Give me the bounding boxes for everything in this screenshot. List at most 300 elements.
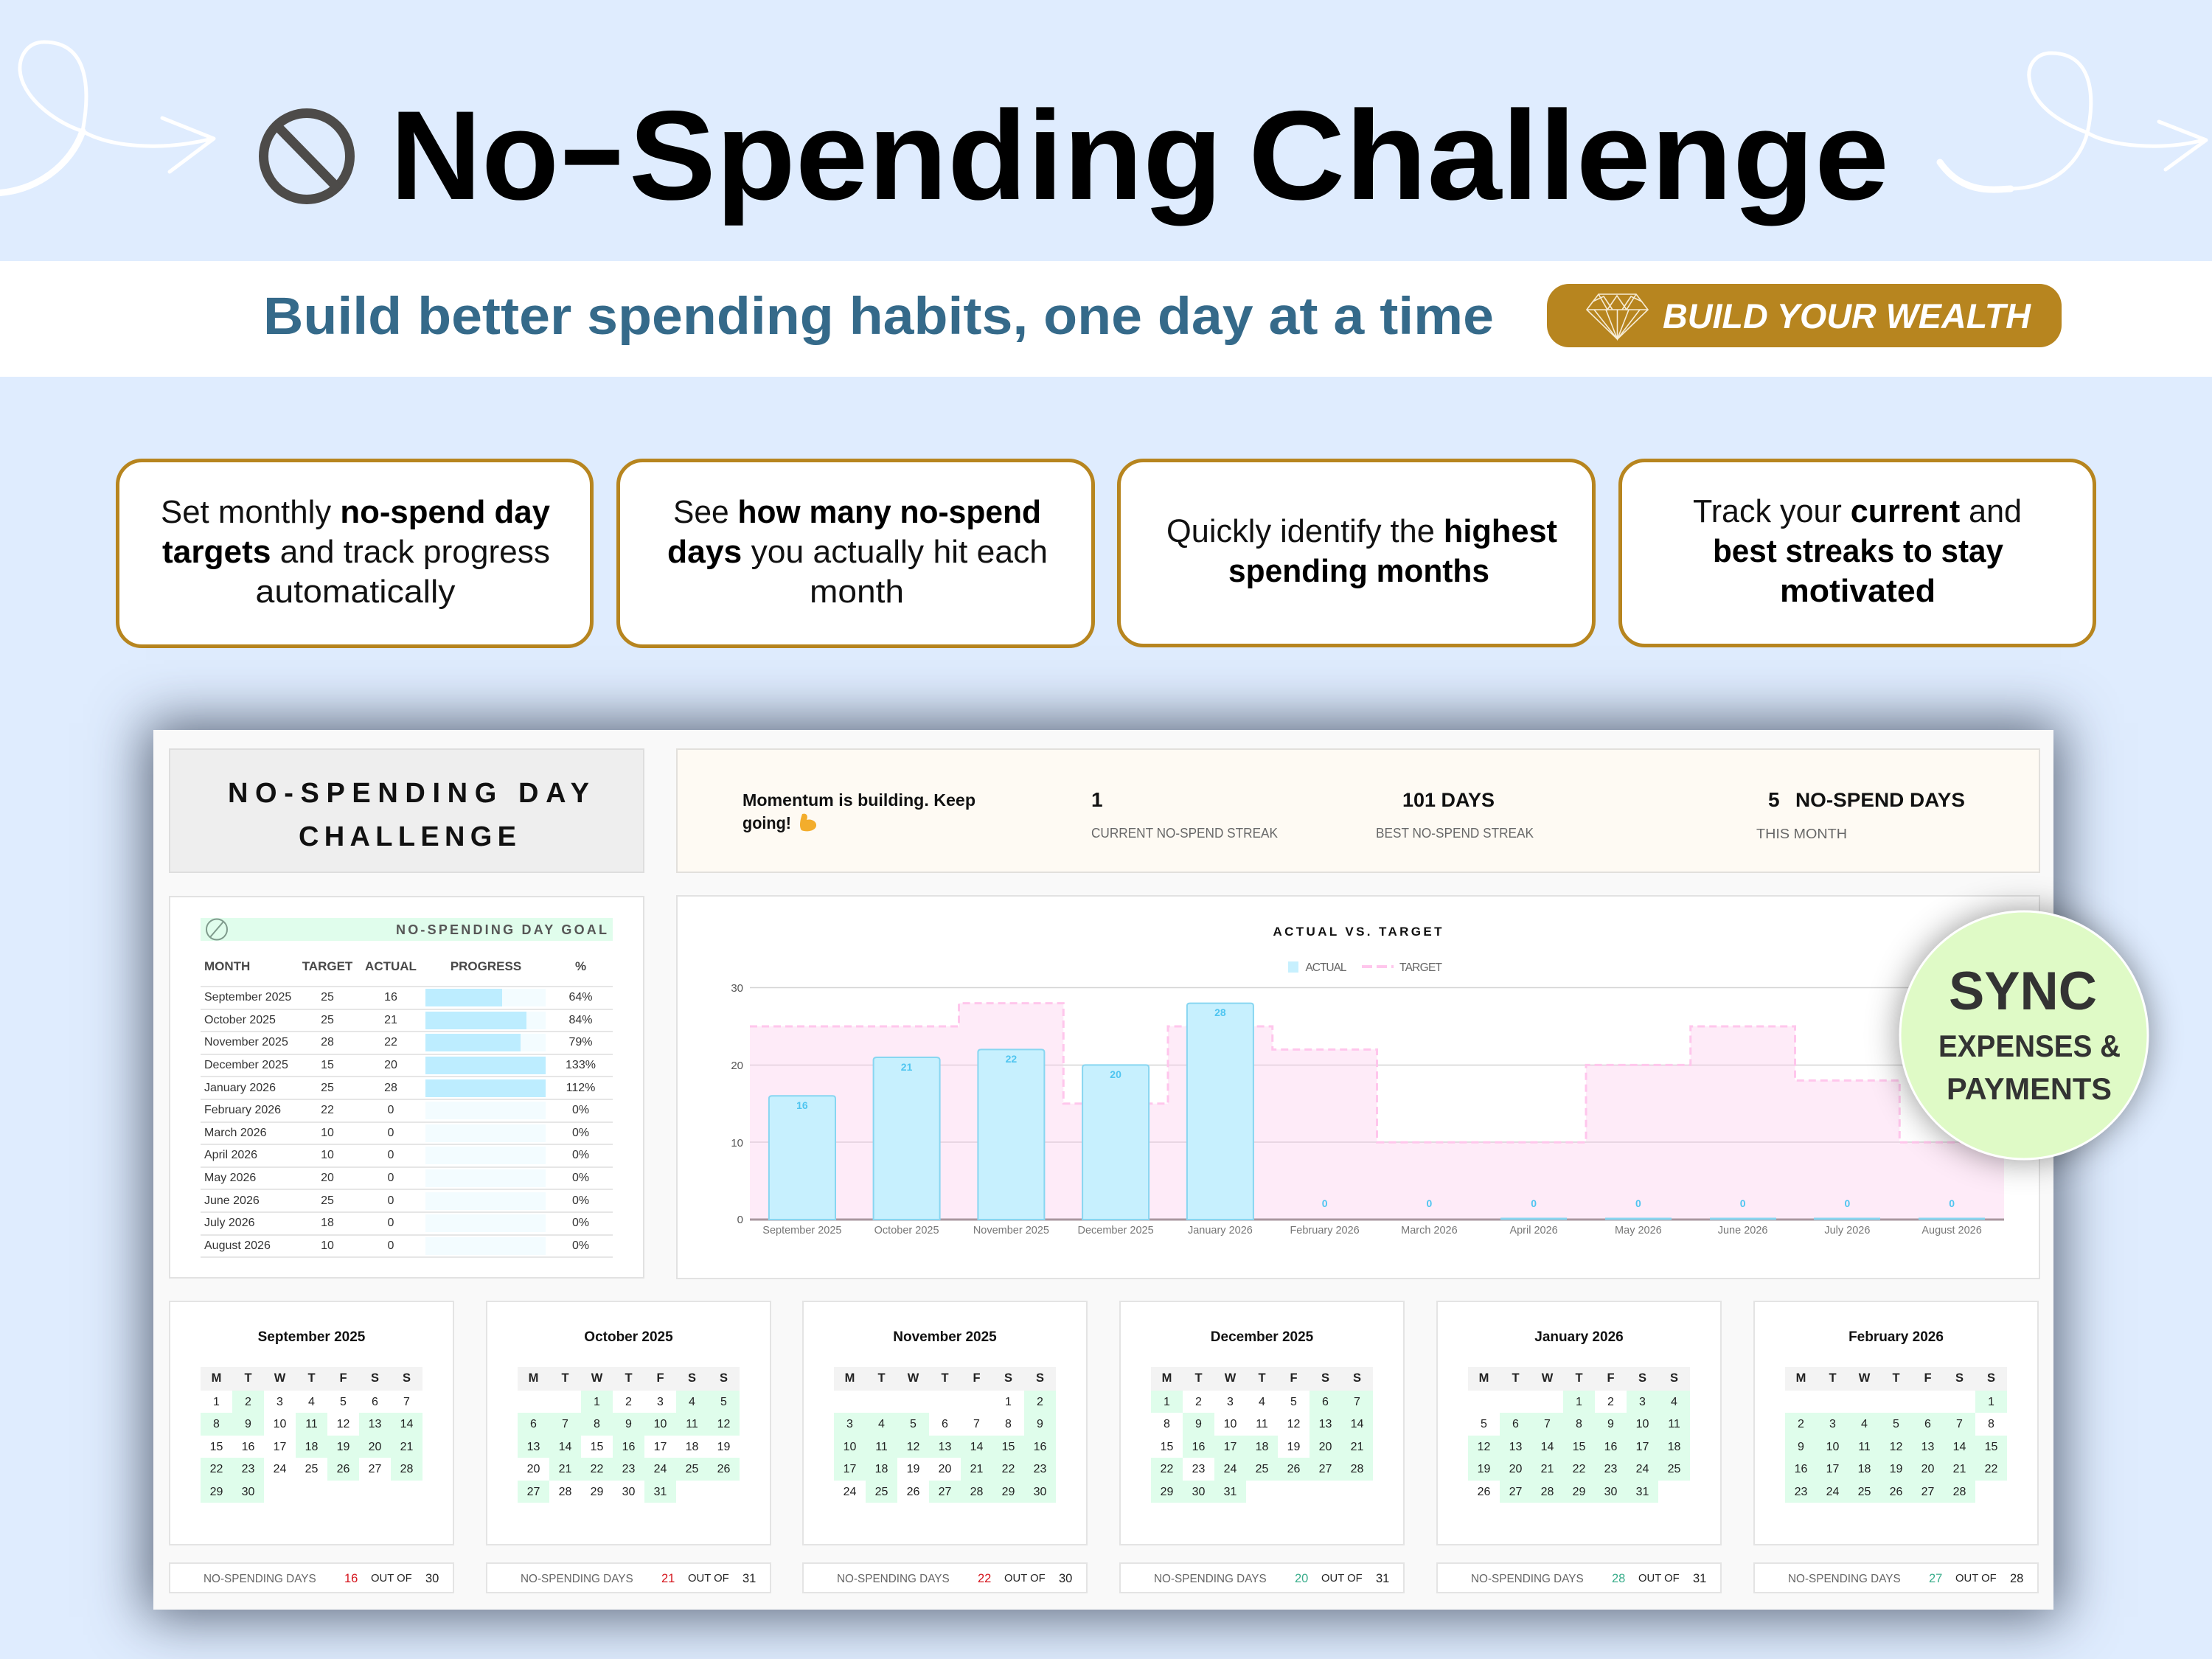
calendar grid: 1 [1164, 1396, 1170, 1408]
x axis labels: September 2025 [762, 1225, 842, 1237]
calendar grid: M [1479, 1371, 1489, 1385]
goal table: 18 [321, 1217, 334, 1229]
subtitle: Build better spending habits, one day at a time [263, 288, 1494, 346]
calendar grid: 25 [305, 1463, 318, 1475]
summary: September: 16 [344, 1572, 358, 1585]
calendar grid: 28 [1351, 1463, 1363, 1475]
calendar grid: 23 [1604, 1463, 1617, 1475]
x axis labels: July 2026 [1824, 1225, 1870, 1237]
calendar grid: 3 [846, 1418, 853, 1430]
calendar grid: 26 [1287, 1463, 1300, 1475]
calendar grid: 4 [1671, 1396, 1677, 1408]
calendar grid: 19 [1890, 1463, 1902, 1475]
calendar: November 2025 [802, 1301, 1088, 1545]
calendar grid: F [339, 1371, 347, 1385]
goal table: 0 [388, 1104, 394, 1116]
goal table: 20 [384, 1059, 397, 1071]
calendar grid: 25 [875, 1486, 888, 1498]
calendar grid [518, 1367, 740, 1503]
calendar grid: 6 [530, 1418, 537, 1430]
calendar grid: 10 [1636, 1418, 1649, 1430]
calendar grid: W [1225, 1371, 1236, 1385]
calendar heading: February 2026 [1848, 1329, 1944, 1345]
calendar grid: 27 [527, 1486, 540, 1498]
goal table: ACTUAL [365, 959, 417, 973]
goal table: 22 [321, 1104, 334, 1116]
goal table: 22 [384, 1036, 397, 1048]
calendar heading: November 2025 [893, 1329, 997, 1345]
badge: build your wealth: BUILD YOUR WEALTH [1663, 296, 2031, 335]
data labels: 0 [1531, 1197, 1537, 1209]
calendar grid: 20 [939, 1463, 951, 1475]
calendar grid: 21 [559, 1463, 571, 1475]
actual bars [769, 1004, 1253, 1220]
calendar grid: 5 [340, 1396, 347, 1408]
calendar grid: 30 [622, 1486, 635, 1498]
title [390, 76, 1889, 226]
calendar grid: 1 [594, 1396, 600, 1408]
summary: November: NO-SPENDING DAYS [837, 1573, 950, 1585]
summary: September: NO-SPENDING DAYS [204, 1573, 316, 1585]
calendar grid: S [688, 1371, 696, 1385]
y axis labels: 10 [731, 1137, 743, 1150]
calendar grid: T [1194, 1371, 1203, 1385]
calendar grid: T [1258, 1371, 1266, 1385]
data labels [796, 1006, 1955, 1209]
calendar grid: 20 [369, 1441, 381, 1453]
calendar grid: S [720, 1371, 728, 1385]
calendar grid: S [1670, 1371, 1678, 1385]
calendar grid: T [1829, 1371, 1837, 1385]
calendar grid: 10 [1224, 1418, 1237, 1430]
calendar grid: 18 [1668, 1441, 1680, 1453]
calendar grid: 28 [559, 1486, 571, 1498]
calendar grid: 6 [372, 1396, 378, 1408]
calendar grid: 13 [1319, 1418, 1332, 1430]
callout: sync badge: EXPENSES & [1938, 1029, 2121, 1063]
badge: build your wealth [1547, 284, 2062, 347]
calendar grid: 7 [1544, 1418, 1551, 1430]
card: days hit each month: See how many no-spend [673, 494, 1041, 530]
calendar grid: F [1290, 1371, 1298, 1385]
goal table: 79% [568, 1036, 593, 1048]
goal table: April 2026 [204, 1149, 257, 1161]
calendar grid: 26 [907, 1486, 919, 1498]
calendar grid: 3 [276, 1396, 283, 1408]
calendar grid: 22 [1002, 1463, 1015, 1475]
goal table: 0% [572, 1217, 589, 1229]
calendar grid: 15 [1161, 1441, 1173, 1453]
panel: streak status [676, 748, 2040, 873]
panel: streak status: THIS MONTH [1756, 827, 1847, 841]
calendar grid: S [371, 1371, 379, 1385]
chart: actual vs target [676, 895, 2040, 1279]
summary: October: OUT OF [688, 1573, 729, 1585]
calendar grid: 18 [305, 1441, 318, 1453]
calendar grid: 9 [245, 1418, 251, 1430]
data labels: 0 [1427, 1197, 1433, 1209]
summary: February: 28 [2010, 1572, 2023, 1585]
calendar grid: S [403, 1371, 411, 1385]
summary: January: 31 [1693, 1572, 1706, 1585]
calendar grid: 10 [844, 1441, 856, 1453]
calendar grid: 18 [1256, 1441, 1268, 1453]
goal table: 0 [388, 1194, 394, 1207]
calendar: January 2026 [1436, 1301, 1722, 1545]
x axis labels: November 2025 [973, 1225, 1049, 1237]
chart title: ACTUAL VS. TARGET [1273, 925, 1442, 939]
calendar grid: 9 [1607, 1418, 1614, 1430]
calendar grid: 9 [625, 1418, 632, 1430]
summary: February: OUT OF [1955, 1573, 1997, 1585]
calendar grid: 11 [875, 1441, 888, 1453]
calendar heading: January 2026 [1534, 1329, 1624, 1345]
summary: December: 20 [1295, 1572, 1308, 1585]
panel: streak status: CURRENT NO-SPEND STREAK [1091, 826, 1278, 841]
calendar grid: S [1955, 1371, 1964, 1385]
y axis labels: 0 [737, 1214, 743, 1226]
summary: December: 31 [1376, 1572, 1389, 1585]
calendar grid: 7 [403, 1396, 410, 1408]
goal table: TARGET [302, 959, 352, 973]
calendar grid: 29 [1573, 1486, 1585, 1498]
data labels: 21 [901, 1061, 913, 1073]
calendar grid: M [529, 1371, 538, 1385]
calendar grid: 7 [1956, 1418, 1963, 1430]
calendar grid: 7 [973, 1418, 980, 1430]
calendar grid: 20 [1319, 1441, 1332, 1453]
calendar grid: 3 [1227, 1396, 1234, 1408]
x axis labels [762, 1225, 1982, 1237]
x axis labels: February 2026 [1290, 1225, 1360, 1237]
calendar grid: 8 [594, 1418, 600, 1430]
card: monthly targets: targets and track progress [162, 534, 550, 570]
goal table: 84% [568, 1014, 593, 1026]
calendar grid: 20 [1509, 1463, 1522, 1475]
calendar grid: W [591, 1371, 602, 1385]
calendar grid: 16 [622, 1441, 635, 1453]
target dashed line [750, 1004, 2004, 1142]
card: highest spending months [1119, 460, 1594, 646]
summary: December [1119, 1562, 1405, 1593]
calendar grid: 13 [369, 1418, 381, 1430]
calendar grid: 21 [400, 1441, 413, 1453]
goal table: May 2026 [204, 1172, 256, 1184]
calendar grid: 1 [1005, 1396, 1012, 1408]
summary: January: OUT OF [1638, 1573, 1680, 1585]
calendar grid: S [1353, 1371, 1361, 1385]
goal table: % [575, 959, 586, 973]
calendar grid: 22 [210, 1463, 223, 1475]
calendar grid: 25 [1668, 1463, 1680, 1475]
calendar grid: 3 [1829, 1418, 1836, 1430]
card: monthly targets [118, 460, 591, 646]
goal table: 0 [388, 1217, 394, 1229]
data labels: 0 [1845, 1197, 1851, 1209]
calendar grid [834, 1367, 1056, 1503]
target area [750, 1004, 2004, 1220]
calendar grid: 19 [907, 1463, 919, 1475]
calendar grid: 4 [1259, 1396, 1265, 1408]
calendar grid: F [1607, 1371, 1615, 1385]
calendar grid: 31 [1636, 1486, 1649, 1498]
summary: October: NO-SPENDING DAYS [521, 1573, 633, 1585]
goal table: 21 [384, 1014, 397, 1026]
data labels: 20 [1110, 1068, 1121, 1080]
goal table: July 2026 [204, 1217, 255, 1229]
calendar grid: 28 [1953, 1486, 1966, 1498]
calendar grid: 24 [654, 1463, 667, 1475]
calendar grid: W [1542, 1371, 1553, 1385]
calendar grid: 26 [717, 1463, 730, 1475]
calendar grid: T [877, 1371, 886, 1385]
goal table: September 2025 [204, 991, 291, 1004]
calendar grid: 28 [1541, 1486, 1554, 1498]
calendar grid: 13 [527, 1441, 540, 1453]
calendar grid: 14 [1351, 1418, 1363, 1430]
calendar grid: 25 [686, 1463, 698, 1475]
calendar heading: October 2025 [584, 1329, 673, 1345]
y axis labels: 30 [731, 982, 743, 995]
title: No [390, 85, 559, 226]
table heading bar: NO-SPENDING DAY GOAL [396, 922, 607, 937]
goal table: 16 [384, 991, 397, 1004]
white subtitle band [0, 261, 2212, 377]
calendar grid: M [845, 1371, 855, 1385]
calendar grid: 9 [1195, 1418, 1202, 1430]
x axis labels: June 2026 [1718, 1225, 1767, 1237]
calendar grid: 10 [654, 1418, 667, 1430]
card: streaks: best streaks to stay [1713, 533, 2004, 569]
goal table: March 2026 [204, 1127, 267, 1139]
summary: December: OUT OF [1321, 1573, 1363, 1585]
calendar grid: M [1162, 1371, 1172, 1385]
goal table: 0% [572, 1194, 589, 1207]
calendar grid: 11 [305, 1418, 318, 1430]
calendar grid: T [625, 1371, 633, 1385]
goal table: 0% [572, 1104, 589, 1116]
calendar grid: 25 [1256, 1463, 1268, 1475]
summary: October: 31 [742, 1572, 756, 1585]
calendar grid: T [941, 1371, 949, 1385]
panel: dashboard title: CHALLENGE [299, 821, 516, 852]
calendar grid: 13 [1921, 1441, 1934, 1453]
goal table: August 2026 [204, 1239, 271, 1252]
calendar grid: 16 [1034, 1441, 1046, 1453]
calendar grid: F [656, 1371, 664, 1385]
calendar grid: T [244, 1371, 252, 1385]
calendar grid: 11 [1858, 1441, 1871, 1453]
calendar grid: 16 [1795, 1463, 1807, 1475]
calendar grid: 14 [559, 1441, 571, 1453]
calendar grid: 30 [1604, 1486, 1617, 1498]
calendar grid: S [1987, 1371, 1995, 1385]
goal table: January 2026 [204, 1082, 276, 1094]
title: Challenge [1248, 85, 1889, 226]
calendar grid: 28 [970, 1486, 983, 1498]
callout: sync badge: SYNC [1949, 961, 2097, 1021]
calendar grid: 21 [1541, 1463, 1554, 1475]
calendar grid: 26 [337, 1463, 349, 1475]
calendar grid: W [274, 1371, 285, 1385]
calendar grid: 2 [1798, 1418, 1804, 1430]
calendar grid: 15 [1985, 1441, 1997, 1453]
panel: streak status: 5 [1768, 788, 1780, 811]
data labels: 0 [1949, 1197, 1955, 1209]
calendar grid: S [1036, 1371, 1044, 1385]
calendar grid: 14 [400, 1418, 413, 1430]
chart legend [1288, 961, 1443, 974]
goal table: 20 [321, 1172, 334, 1184]
calendar grid: 26 [1478, 1486, 1490, 1498]
summary: October: 21 [661, 1572, 675, 1585]
panel: streak status: BEST NO-SPEND STREAK [1376, 826, 1534, 841]
goal table: 64% [568, 991, 593, 1004]
panel: dashboard title: NO-SPENDING DAY [228, 778, 589, 809]
calendar grid: 12 [1478, 1441, 1490, 1453]
summary: November: 22 [978, 1572, 991, 1585]
calendar grid: M [1796, 1371, 1806, 1385]
calendar: October 2025 [486, 1301, 771, 1545]
summary: January: 28 [1612, 1572, 1625, 1585]
calendar grid: 4 [878, 1418, 885, 1430]
chart legend: TARGET [1399, 961, 1443, 974]
card: monthly targets: automatically [255, 574, 456, 610]
calendar grid: 22 [591, 1463, 603, 1475]
calendar heading: September 2025 [258, 1329, 365, 1345]
calendar grid [201, 1367, 422, 1503]
goal table: 112% [566, 1082, 595, 1094]
calendar grid: 24 [274, 1463, 286, 1475]
x axis labels: August 2026 [1921, 1225, 1982, 1237]
calendar grid: S [1638, 1371, 1646, 1385]
calendar grid: 14 [970, 1441, 983, 1453]
calendar grid: 13 [939, 1441, 951, 1453]
calendar grid: 12 [1287, 1418, 1300, 1430]
card: streaks: motivated [1780, 573, 1935, 609]
calendar grid: 17 [1224, 1441, 1237, 1453]
calendar grid: 3 [1639, 1396, 1646, 1408]
calendar grid: 2 [1195, 1396, 1202, 1408]
calendar grid: 8 [1576, 1418, 1582, 1430]
summary: November [802, 1562, 1088, 1593]
goal table: 28 [321, 1036, 334, 1048]
icon: flexed arm [800, 814, 816, 831]
goal table: 15 [321, 1059, 334, 1071]
calendar grid: 9 [1798, 1441, 1804, 1453]
summary: January: NO-SPENDING DAYS [1471, 1573, 1584, 1585]
calendar grid: 28 [400, 1463, 413, 1475]
calendar grid: 16 [242, 1441, 254, 1453]
calendar grid: 6 [1322, 1396, 1329, 1408]
calendar grid: 10 [1826, 1441, 1839, 1453]
calendar grid: 1 [213, 1396, 220, 1408]
goal table: 0% [572, 1149, 589, 1161]
goal table: 0 [388, 1127, 394, 1139]
panel: streak status: Momentum is building. Keep [742, 790, 975, 810]
calendar: December 2025 [1119, 1301, 1405, 1545]
goal table: November 2025 [204, 1036, 288, 1048]
card: days hit each month: days you actually hit each [667, 534, 1048, 570]
panel: streak status: going! [742, 813, 791, 832]
calendar grid: 27 [1319, 1463, 1332, 1475]
goal table: 0 [388, 1239, 394, 1252]
goal table: 0% [572, 1172, 589, 1184]
calendar grid: 24 [1224, 1463, 1237, 1475]
calendar grid: 15 [1573, 1441, 1585, 1453]
calendar grid: 17 [1636, 1441, 1649, 1453]
y axis labels [731, 982, 743, 1226]
calendar grid: 19 [1478, 1463, 1490, 1475]
card: days hit each month [618, 460, 1093, 646]
calendar grid: 31 [1224, 1486, 1237, 1498]
panel: streak status: NO-SPEND DAYS [1795, 789, 1965, 811]
data labels: 28 [1214, 1006, 1226, 1018]
calendar: September 2025 [169, 1301, 454, 1545]
icon: left looping arrow [0, 42, 214, 193]
goal table: 0 [388, 1149, 394, 1161]
calendar grid: 10 [274, 1418, 286, 1430]
calendar grid: 23 [1034, 1463, 1046, 1475]
calendar grid: 17 [654, 1441, 667, 1453]
calendar grid: 5 [720, 1396, 727, 1408]
calendar grid: 16 [1192, 1441, 1205, 1453]
calendar grid: 11 [686, 1418, 698, 1430]
calendar grid: W [1859, 1371, 1870, 1385]
data labels: 22 [1006, 1053, 1017, 1065]
calendar grid: 30 [1034, 1486, 1046, 1498]
panel: no-spending day goal table [169, 896, 644, 1279]
calendar grid: 25 [1858, 1486, 1871, 1498]
calendar grid: 4 [308, 1396, 315, 1408]
calendar grid: 7 [562, 1418, 568, 1430]
calendar grid: 5 [910, 1418, 917, 1430]
x axis labels: May 2026 [1615, 1225, 1662, 1237]
summary: September: OUT OF [371, 1573, 412, 1585]
goal table: 0% [572, 1127, 589, 1139]
calendar grid: 17 [844, 1463, 856, 1475]
summary: February [1753, 1562, 2039, 1593]
card: streaks: Track your current and [1693, 493, 2022, 529]
calendar grid: 19 [717, 1441, 730, 1453]
calendar grid: 2 [1037, 1396, 1043, 1408]
calendar grid: 23 [622, 1463, 635, 1475]
calendar grid: 11 [1668, 1418, 1680, 1430]
calendar grid [1785, 1367, 2007, 1503]
calendar grid: 24 [1636, 1463, 1649, 1475]
calendar grid: 3 [657, 1396, 664, 1408]
title: Spending [629, 85, 1222, 226]
calendar grid: 12 [907, 1441, 919, 1453]
calendar grid: 8 [213, 1418, 220, 1430]
calendar grid: 17 [1826, 1463, 1839, 1475]
calendar grid: 20 [1921, 1463, 1934, 1475]
calendar grid: 22 [1161, 1463, 1173, 1475]
calendar grid [1151, 1367, 1373, 1503]
icon: diamond [1587, 294, 1648, 339]
calendar grid: 5 [1481, 1418, 1487, 1430]
calendar grid: S [1004, 1371, 1012, 1385]
goal table: PROGRESS [451, 959, 521, 973]
card: streaks [1621, 460, 2094, 646]
calendar grid: 22 [1985, 1463, 1997, 1475]
calendar grid: 21 [970, 1463, 983, 1475]
table heading bar [201, 918, 613, 941]
calendar grid: 21 [1953, 1463, 1966, 1475]
data labels: 16 [796, 1099, 808, 1111]
summary: October [486, 1562, 771, 1593]
gridlines [750, 988, 2004, 1142]
